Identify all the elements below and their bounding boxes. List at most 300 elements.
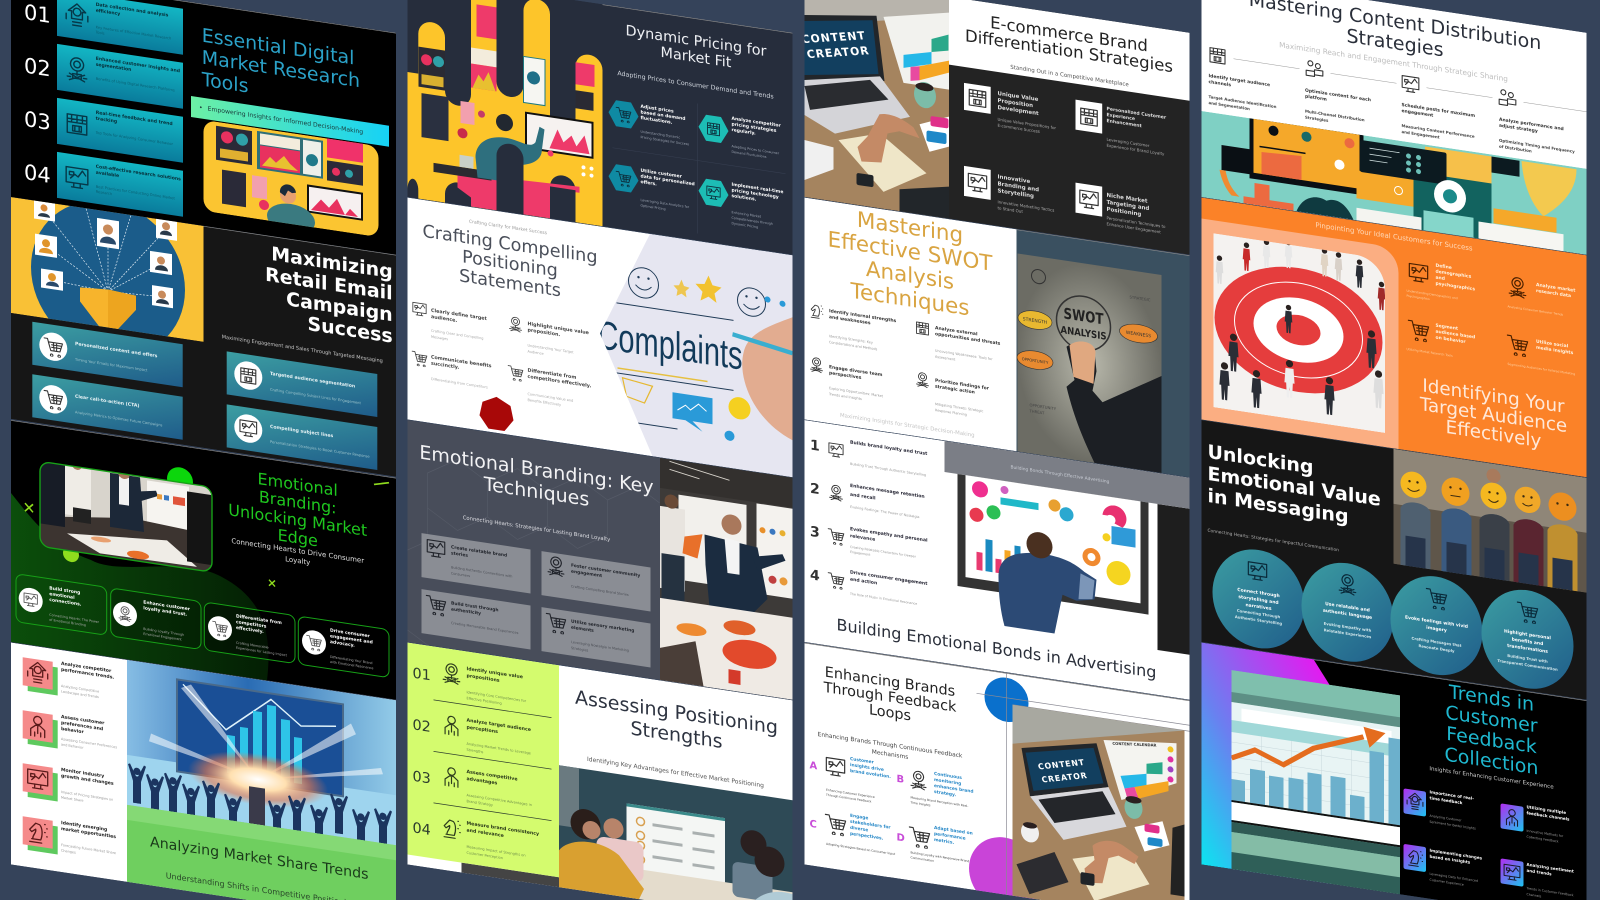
title: Assessing Positioning — [575, 686, 778, 739]
item: external opportunities — [916, 322, 1001, 369]
circle 2: Evoking Empathy with — [1324, 621, 1372, 633]
card 01: efficiency — [96, 8, 120, 17]
photo: laptop and calendar: CONTENT — [1037, 758, 1086, 772]
item C: stakeholders for — [850, 819, 891, 831]
lime panel: Strengths — [466, 748, 484, 754]
item: innovative branding: to Stand Out — [998, 205, 1023, 214]
item 3: Differentiating from Competitors — [431, 377, 488, 390]
subtitle: Connecting Hearts: Strategies for Impactful Communication — [1208, 528, 1339, 553]
item: unique value: Proposition — [998, 98, 1033, 109]
gradient banner — [191, 96, 389, 147]
slide: E-commerce Brand Differentiation Strategies — [800, 0, 1190, 255]
item 2: and Behavior — [61, 743, 84, 750]
circle 4 — [1482, 583, 1574, 695]
card: community engagement: engagement — [571, 569, 602, 579]
card 01: Data collection and analysis — [96, 2, 169, 19]
photo: content creator desk — [800, 0, 949, 219]
subtitle: Mechanisms — [872, 749, 908, 761]
item: segment audience: Segment — [1436, 323, 1459, 332]
title: Unlocking — [1208, 440, 1313, 479]
item: demographics: Psychographics — [1406, 294, 1430, 301]
item: utilize customer data: Optimal Pricing — [640, 203, 666, 211]
list item 4: 4 — [810, 567, 820, 585]
item: analyzing sentiment: Channels — [1527, 892, 1542, 899]
photo: emoji masks — [1394, 449, 1586, 593]
card 02: 02 — [24, 53, 51, 81]
item: social media: media insights — [1536, 345, 1574, 356]
card 03: 03 — [24, 106, 51, 135]
card: trust through authenticity: Creating Memorable Brand Experiences — [451, 621, 519, 635]
item: innovative branding: Storytelling — [998, 188, 1034, 200]
honeycomb pattern — [408, 452, 660, 680]
title: Strategies — [1347, 24, 1444, 61]
card 3: effectively. — [236, 625, 264, 635]
item: external opportunities: Analyze external — [935, 325, 978, 338]
title: Dynamic Pricing for — [626, 23, 766, 60]
item: implement real-time pricing: solutions. — [732, 193, 757, 203]
card: personalized content: Timing Your Emails for Maximum Impact — [74, 357, 148, 373]
item: analyze competitor pricing: Demand Fluctuations — [732, 150, 767, 159]
item: demographics: Understanding Demographics and — [1406, 289, 1458, 300]
list item 3: Creating Relatable Characters for Deeper — [850, 545, 917, 559]
card 3: Experiences for Lasting Impact — [236, 646, 288, 657]
circle 1: Authentic Storytelling — [1235, 614, 1282, 626]
item: prioritize findings: Prioritize findings for — [935, 378, 990, 392]
slide: Enhancing Brands Through Feedback Loops — [804, 642, 1190, 900]
item: multiple channels: Innovative Methods for — [1527, 829, 1564, 838]
photo: SWOT analysis sketch: OPPORTUNITY — [1030, 402, 1057, 411]
item B: enhances brand — [934, 783, 974, 795]
card 02: Benefits of Using Digital Research Platforms — [96, 77, 175, 93]
step 3 — [1402, 76, 1492, 148]
item: diverse team: Trends and Insights — [828, 392, 862, 401]
item: unique value: Development — [998, 105, 1039, 117]
card: trust through authenticity: authenticity — [451, 606, 481, 617]
lime panel: advantages — [466, 776, 498, 787]
item 4: market opportunities — [61, 826, 116, 840]
item: multiple channels: feedback channels — [1527, 810, 1570, 822]
card 04: available — [96, 170, 119, 179]
card: audience segmentation — [227, 351, 377, 417]
item: segment audience: audience based — [1436, 329, 1475, 341]
card 01 — [24, 0, 183, 55]
item: niche market: Targeting and — [1106, 200, 1149, 212]
lime panel: Assessing Competitive Advantages in — [466, 793, 532, 807]
item 3: Communicate benefits — [431, 354, 492, 369]
item 2: Understanding Your Target — [528, 344, 574, 354]
item C: Adapting Strategies Based on Consumer Input — [826, 842, 896, 856]
item 4 — [22, 816, 116, 854]
title: Feedback — [1446, 722, 1537, 758]
circle 1: narratives — [1245, 602, 1272, 612]
crosshair lines — [976, 668, 1190, 900]
item B — [896, 765, 974, 814]
title: Essential Digital — [202, 24, 354, 69]
item: internal strengths — [811, 304, 897, 354]
item B: Measuring Brand Perception with Real- — [910, 795, 968, 808]
photo: complaints board: Complaints — [598, 312, 742, 379]
slide: Mastering Effective SWOT Analysis Techniques — [804, 198, 1190, 477]
title: Campaign — [286, 287, 393, 326]
photo: laptop and calendar: CONTENT CALENDAR — [1112, 741, 1157, 748]
card 4: Differentiating Your Brand — [330, 655, 372, 665]
card: subject lines: Personalization Strategies to Boost Customer Response — [270, 440, 370, 459]
circle 2: Use relatable and — [1325, 601, 1370, 614]
slide: Building Emotional Bonds in Advertising — [804, 420, 1190, 700]
lime panel: Customer Perception — [466, 851, 503, 860]
title band — [127, 805, 396, 900]
photo: target with people — [1214, 229, 1386, 433]
step 2: Optimize content for each — [1305, 88, 1371, 103]
item: market research: Analyze market — [1536, 282, 1576, 294]
item: diverse team: perspectives — [829, 370, 862, 381]
list item 2: Enhances message retention — [850, 483, 925, 500]
card: community engagement — [542, 551, 650, 611]
lime panel: Assess competitive — [466, 769, 518, 783]
card: relatable stories: stories — [451, 550, 468, 559]
item: adjust prices: Adjust prices — [640, 104, 674, 115]
item: personalized experience — [1076, 100, 1167, 157]
card: clear CTA: Analyzing Metrics to Optimize Future Campaigns — [75, 410, 163, 427]
item: real-time feedback: time feedback — [1430, 795, 1463, 805]
illustration: pillars and analyst — [408, 0, 602, 226]
list item 3 — [810, 520, 928, 566]
item D: Communication — [910, 855, 934, 863]
title: Analysis — [866, 257, 954, 295]
item: diverse team: Exploring Opportunities: Market — [829, 386, 884, 398]
item: adjust prices: fluctuations. — [640, 115, 673, 126]
subtitle: Insights for Enhancing Customer Experience — [1429, 766, 1554, 791]
item: personalized experience: Personalized Customer — [1106, 106, 1167, 121]
list item 1 — [810, 434, 928, 478]
title: Emotional Value — [1207, 462, 1381, 511]
illustration: exploding chart and crowd — [127, 660, 396, 858]
card 3: competitors — [236, 619, 267, 630]
kicker: Crafting Clarity for Market Success — [469, 219, 548, 237]
title: Target Audience — [1419, 394, 1567, 437]
circle 4: Transparent Communication — [1497, 658, 1558, 672]
circle 2: authentic language — [1323, 608, 1372, 621]
card 04 — [24, 147, 183, 217]
card: community engagement: Crafting Compelling Brand Stories — [571, 584, 629, 597]
item C: Engage — [850, 813, 868, 821]
slide: Unlocking Emotional Value in Messaging — [1202, 420, 1586, 700]
list item 3: relevance — [850, 533, 875, 543]
title: Identifying Your — [1422, 376, 1565, 418]
slide: Trends in Customer Feedback Collection — [1202, 642, 1586, 900]
circle 1: Connect through — [1237, 587, 1280, 599]
item: multiple channels: Utilizing multiple — [1527, 804, 1566, 815]
lime panel: Brand Strategy — [466, 799, 493, 807]
item: analyze competitor pricing — [698, 114, 781, 158]
card: community engagement: Foster customer community — [571, 563, 640, 579]
item A: Customer — [850, 756, 875, 766]
item B: monitoring — [934, 777, 961, 787]
item 2: proposition. — [528, 327, 560, 338]
card 1: Build strong — [49, 585, 80, 596]
list item 2: Evoking Feelings: The Power of Nostalgia — [850, 505, 920, 519]
item: implementing changes — [1404, 844, 1483, 890]
title: Enhancing Brands — [825, 665, 955, 700]
item: analyze competitor pricing: pricing strategies — [732, 121, 777, 134]
title: Crafting Compelling — [422, 222, 598, 268]
illustration: funnel — [11, 197, 204, 342]
peach panel — [1202, 218, 1398, 449]
item: unique value: Unique Value Propositions for — [998, 117, 1056, 130]
title: Market Research — [202, 46, 360, 92]
step 4: adjust strategy — [1499, 123, 1538, 134]
circle 3 — [1390, 570, 1482, 682]
item: segment audience: on behavior — [1436, 335, 1466, 345]
slide: Mastering Content Distribution Strategies — [1202, 0, 1586, 255]
item: diverse team — [810, 357, 884, 404]
kicker: Pinpointing Your Ideal Customers for Success — [1315, 220, 1473, 253]
card 03 — [24, 93, 183, 163]
title: Strengths — [630, 716, 723, 753]
item: analyzing sentiment — [1500, 858, 1574, 900]
step 4 — [1499, 89, 1586, 162]
list item 2: and recall — [850, 492, 876, 502]
item: analyzing sentiment: Trends in Customer Feedback — [1526, 886, 1574, 897]
item 2: preferences and — [61, 720, 103, 732]
circle 3: Evoke feelings with vivid — [1405, 615, 1468, 630]
card: relatable stories: Consumers — [451, 571, 470, 578]
lime panel: 02 — [413, 717, 431, 736]
item 3: succinctly. — [431, 361, 459, 371]
list item 1: Building Trust Through Authentic Storytelling — [850, 462, 926, 477]
item: analyze competitor pricing: Adapting Prices to Consumer — [732, 144, 780, 156]
photo: content creator desk: CONTENT — [800, 29, 867, 46]
item: unique value: E-commerce Success — [998, 123, 1040, 134]
item 3: Monitor industry — [61, 767, 104, 779]
slide: Identifying Your Target Audience Effectively — [1202, 198, 1586, 477]
photo: man at whiteboard — [958, 474, 1148, 648]
title: Maximizing — [271, 242, 393, 283]
step 4: Optimizing Timing and Frequency — [1499, 138, 1575, 154]
item 4: Differentiate from — [528, 368, 576, 381]
title: E-commerce Brand — [990, 13, 1148, 55]
item: adjust prices: Pricing Strategies for Success — [640, 135, 689, 146]
title: Differentiation Strategies — [965, 26, 1173, 76]
item: implement real-time pricing — [698, 177, 783, 233]
card 02: Enhanced customer insights and — [96, 56, 180, 74]
lime panel: 04 — [413, 820, 431, 839]
card: audience segmentation: Crafting Compelling Subject Lines for Engagement — [270, 388, 361, 405]
item: social media: Utilize social — [1536, 339, 1569, 350]
subtitle: Adapting Prices to Consumer Demand and Trends — [617, 70, 774, 101]
item: external opportunities: Assessment — [935, 355, 956, 362]
list item 3: Evokes empathy and personal — [850, 526, 928, 544]
title: in Messaging — [1208, 484, 1349, 528]
item C — [810, 807, 896, 856]
item: external opportunities: Uncovering Weaknesses: Tools for — [935, 349, 993, 361]
item 2: Assessing Consumer Preferences — [61, 737, 117, 749]
item 1: Clearly define target — [431, 308, 487, 322]
list item 4 — [810, 563, 928, 608]
item 1: performance trends. — [61, 667, 114, 681]
magenta circle — [969, 832, 1041, 900]
item: implementing changes: based on insights — [1430, 854, 1471, 865]
item: innovative branding: Branding and — [998, 181, 1039, 193]
card: sensory marketing — [542, 607, 650, 667]
dark strip — [1158, 504, 1190, 655]
item: adjust prices — [608, 99, 689, 146]
circle 1: Connecting Through — [1237, 608, 1280, 619]
illustration: abstract media desk — [1202, 111, 1586, 255]
card 2: Building Loyalty Through — [143, 627, 184, 637]
item 1: Analyze competitor — [61, 661, 112, 674]
lime panel: Analyze target audience — [466, 717, 531, 733]
item: multiple channels — [1500, 800, 1570, 845]
item A: Enhancing Customer Experience — [826, 788, 875, 799]
title: Unlocking Market — [228, 500, 367, 540]
photo: SWOT analysis sketch: OPPORTUNITY — [1022, 356, 1049, 365]
footer caption: Maximizing Insights for Strategic Decision-Making — [840, 413, 975, 439]
item B: strategy. — [934, 789, 956, 798]
card 4: engagement and — [330, 633, 373, 646]
accents — [24, 467, 390, 587]
slide: Analyzing Market Share Trends — [11, 642, 396, 900]
lime panel — [408, 642, 559, 877]
item 4: Changes — [61, 849, 76, 855]
step 4: of Distribution — [1499, 144, 1532, 154]
step 2: Multi-Channel Distribution — [1305, 109, 1365, 122]
lime panel: Identifying Core Competencies for — [466, 690, 527, 703]
photo: presenter at boards — [660, 458, 792, 700]
card 4: Drive consumer — [330, 627, 371, 640]
item C: C — [810, 819, 817, 831]
item: implement real-time pricing: Implement real-time — [732, 182, 783, 195]
item: prioritize findings: Response Planning — [935, 408, 967, 417]
card: sensory marketing: Utilize sensory marketing — [571, 619, 634, 634]
item: utilize customer data: Leveraging Data Analytics for — [640, 198, 690, 209]
illustration: laptop chart — [1232, 670, 1400, 894]
gradient banner: • Empowering Insights for Informed Decision-Making — [199, 104, 363, 136]
card: audience segmentation: Targeted audience segmentation — [270, 371, 355, 390]
title: Techniques — [483, 472, 589, 511]
item D: metrics. — [934, 837, 954, 846]
card: clear CTA — [32, 374, 183, 440]
item D — [896, 819, 973, 869]
item: multiple channels: Collecting Feedback — [1527, 835, 1559, 844]
item 3 — [22, 763, 114, 802]
subtitle: Identifying Key Advantages for Effective Market Positioning — [587, 756, 764, 789]
circle 2: Relatable Experiences — [1324, 627, 1372, 639]
slide: Assessing Positioning Strengths — [408, 642, 792, 900]
item A: Through Continuous Feedback — [825, 793, 872, 804]
card: subject lines: Compelling subject lines — [270, 424, 333, 439]
item: niche market: Personalization Techniques to — [1106, 215, 1166, 229]
item: utilize customer data: Utilize customer — [640, 168, 683, 180]
card 3 — [204, 602, 295, 664]
lime panel: perceptions — [466, 724, 498, 735]
item: implement real-time pricing: pricing technology — [732, 187, 779, 200]
photo: laptop and calendar: CREATOR — [1041, 771, 1088, 785]
item 3 — [412, 351, 492, 390]
title: Retail Email — [265, 263, 393, 305]
item: implement real-time pricing: Competitiveness through — [732, 216, 773, 226]
card 1: Connecting Hearts: The Power — [49, 613, 100, 624]
title: Emotional — [258, 469, 338, 500]
slide: Crafting Compelling Positioning Statements — [408, 198, 792, 477]
item: analyze competitor pricing: Analyze competitor — [732, 116, 781, 129]
item 2 — [22, 710, 117, 749]
subtitle: Maximizing Engagement and Sales Through Targeted Messaging — [222, 334, 383, 364]
item: implementing changes: Implementing changes — [1430, 848, 1483, 861]
list item 4: The Role of Music in Emotional Resonance — [849, 592, 917, 606]
item 4: Identify emerging — [61, 820, 107, 833]
item 4 — [508, 365, 591, 412]
lime panel: Measure brand consistency — [466, 820, 539, 837]
circle 4: benefits and — [1512, 637, 1543, 647]
slide top rule — [804, 643, 1190, 701]
item 2: behavior — [61, 726, 84, 736]
title: Tools — [201, 68, 249, 98]
list item 4: Drives consumer engagement — [850, 569, 928, 587]
item: utilize customer data: data for personalized — [640, 173, 695, 187]
lime panel: propositions — [466, 673, 500, 684]
card 2: Emotional Engagement — [143, 632, 182, 642]
lime panel: Identify unique value — [466, 666, 523, 680]
circle 1 — [1212, 543, 1304, 655]
slide: Emotional Branding Key Techniques — [408, 420, 792, 700]
item: demographics — [1406, 258, 1475, 308]
title: Market Fit — [661, 45, 732, 71]
step 4: Analyze performance and — [1499, 117, 1564, 132]
dividers — [612, 104, 786, 234]
item: niche market — [1076, 183, 1166, 235]
card: relatable stories: Building Authentic Connections with — [451, 565, 512, 579]
item A: A — [810, 760, 817, 772]
item 4: Forecasting Future Market Share — [61, 843, 116, 855]
card: clear CTA: Clear call-to-action (CTA) — [75, 394, 140, 409]
step 3: Measuring Content Performance — [1402, 123, 1475, 139]
grey caption band — [944, 441, 1190, 509]
item: demographics: demographics — [1436, 269, 1472, 280]
photo: SWOT analysis sketch: STRENGTH — [1023, 316, 1047, 326]
list item 1: Builds brand loyalty and trust — [850, 440, 928, 457]
item 3: growth and changes — [61, 773, 114, 787]
photo: complaints board — [598, 226, 792, 477]
title: Customer — [1445, 701, 1538, 737]
item: adjust prices: based on demand — [640, 109, 685, 122]
item 2: Highlight unique value — [528, 321, 590, 336]
lime panel: Measuring Impact of Strengths on — [466, 845, 526, 858]
item: personalized experience: Leveraging Customer — [1106, 137, 1150, 148]
illustration: dashboards on yellow — [204, 122, 378, 236]
item: implement real-time pricing: Dynamic Pricing — [732, 221, 758, 229]
item: personalized experience: Experience for Brand Loyalty — [1106, 143, 1165, 156]
step 2: platform — [1305, 94, 1327, 103]
item 2: Audience — [528, 350, 544, 356]
item: niche market: Niche Market — [1106, 193, 1148, 205]
photo: SWOT analysis sketch — [1017, 253, 1162, 473]
slide: Essential Digital Market Research Tools — [11, 0, 396, 255]
card 2 — [111, 588, 201, 650]
item: internal strengths: and weaknesses — [829, 314, 871, 326]
item: analyzing sentiment: and trends — [1527, 868, 1552, 877]
item: adjust prices: Understanding Dynamic — [640, 130, 680, 140]
item 1 — [22, 657, 114, 698]
circle 4: Building Trust with — [1507, 653, 1548, 664]
item: internal strengths: Considerations and Methods — [829, 340, 877, 351]
circle 3: Resonate Deeply — [1418, 643, 1455, 654]
item: unique value: Unique Value — [998, 91, 1039, 103]
card 04: Cost-effective research solutions — [96, 164, 181, 183]
photo: SWOT analysis sketch: ANALYSIS — [1060, 325, 1106, 343]
circle 2 — [1302, 556, 1394, 668]
card 3: Differentiate from — [236, 613, 282, 626]
